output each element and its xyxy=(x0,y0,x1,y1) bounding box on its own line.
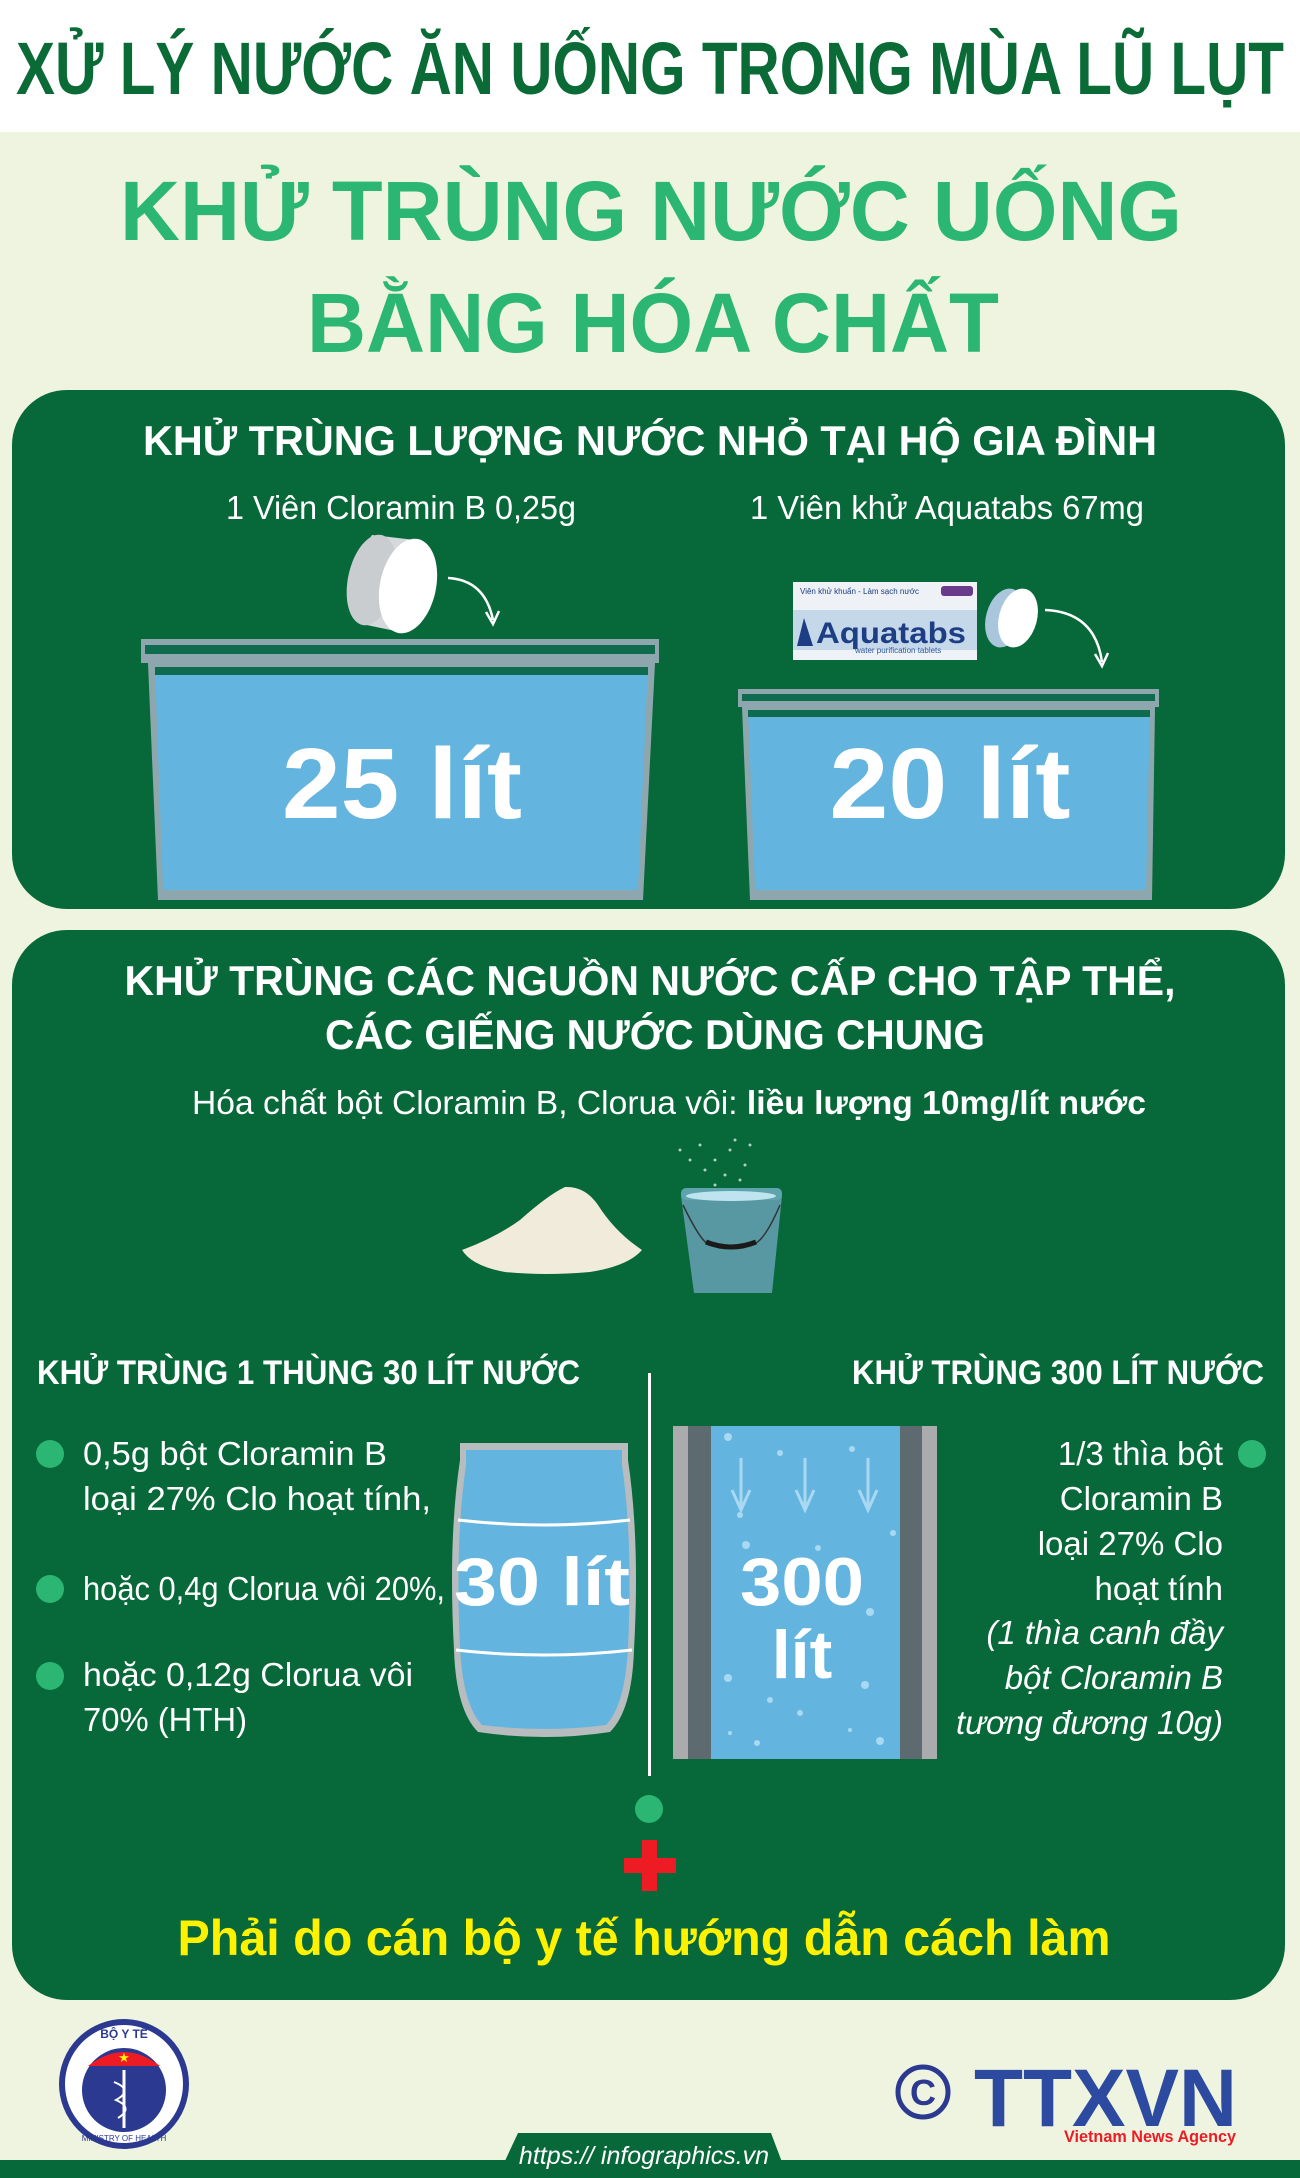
text right: tương đương 10g) xyxy=(956,1704,1223,1741)
subtitle xyxy=(120,164,1182,370)
text right: bột Cloramin B xyxy=(1005,1659,1223,1696)
aquatabs box: Aquatabs xyxy=(816,617,966,650)
bullet list left: 0,5g bột Cloramin B xyxy=(83,1435,387,1472)
barrel 30 lit xyxy=(452,1443,636,1737)
subheading left: KHỬ TRÙNG 1 THÙNG 30 LÍT NƯỚC xyxy=(37,1354,580,1392)
subtitle: KHỬ TRÙNG NƯỚC UỐNG xyxy=(120,164,1182,258)
panel: community xyxy=(12,930,1285,2000)
text right: loại 27% Clo xyxy=(1038,1525,1223,1562)
label: cloramin: 1 Viên Cloramin B 0,25g xyxy=(226,489,576,526)
icon: powder pile xyxy=(462,1187,642,1274)
logo: ministry of health: MINISTRY OF HEALTH xyxy=(82,2134,166,2143)
dosage text: Hóa chất bột Cloramin B, Clorua vôi: liều lượng 10mg/lít nước xyxy=(192,1084,1146,1121)
barrel 30 lit: 30 lít xyxy=(454,1544,630,1620)
footer band with url xyxy=(0,2133,1300,2178)
aquatabs box: water purification tablets xyxy=(854,646,941,655)
logo: ministry of health: BỘ Y TẾ xyxy=(100,2026,148,2041)
panel heading: KHỬ TRÙNG CÁC NGUỒN NƯỚC CẤP CHO TẬP THỂ, xyxy=(124,956,1176,1004)
subheading right: KHỬ TRÙNG 300 LÍT NƯỚC xyxy=(852,1354,1264,1392)
logo: ministry of health xyxy=(62,2022,186,2146)
logo: TTXVN: Vietnam News Agency xyxy=(1064,2127,1237,2146)
bucket 25 lit xyxy=(141,639,659,900)
logo: ministry of health: ★ xyxy=(118,2050,130,2065)
bullet list left: 70% (HTH) xyxy=(83,1701,247,1738)
green dot xyxy=(635,1795,663,1823)
tank 300 lit: lít xyxy=(772,1617,832,1693)
icon: red cross xyxy=(624,1840,676,1891)
text right xyxy=(956,1435,1266,1741)
arrow: tablet to bucket xyxy=(448,578,499,624)
subtitle: BẰNG HÓA CHẤT xyxy=(307,276,999,370)
text right: hoạt tính xyxy=(1095,1570,1223,1607)
bullet list left: hoặc 0,12g Clorua vôi xyxy=(83,1656,413,1693)
bullet list left: hoặc 0,4g Clorua vôi 20%, xyxy=(83,1570,445,1607)
bucket 25 lit: 25 lít xyxy=(282,728,522,840)
bucket 20 lit xyxy=(738,689,1159,900)
bucket 20 lit: 20 lít xyxy=(830,728,1070,840)
bullet list left xyxy=(36,1435,445,1738)
bullet list left: loại 27% Clo hoạt tính, xyxy=(83,1480,431,1517)
footer band with url: https:// infographics.vn xyxy=(519,2142,769,2170)
aquatabs box: Viên khử khuẩn - Làm sạch nước xyxy=(800,587,919,596)
icon: small tablet xyxy=(979,584,1044,652)
text right: 1/3 thìa bột xyxy=(1058,1435,1223,1472)
icon: water bucket xyxy=(678,1138,782,1293)
arrow: aquatabs to bucket xyxy=(1045,610,1108,666)
tank 300 lit: 300 xyxy=(740,1544,864,1620)
text right: Cloramin B xyxy=(1060,1480,1223,1517)
label: aquatabs: 1 Viên khử Aquatabs 67mg xyxy=(750,489,1144,526)
text right: (1 thìa canh đầy xyxy=(986,1614,1225,1651)
tank 300 lit xyxy=(673,1426,937,1759)
panel: household xyxy=(12,390,1285,909)
header band xyxy=(0,0,1300,132)
panel heading: KHỬ TRÙNG LƯỢNG NƯỚC NHỎ TẠI HỘ GIA ĐÌNH xyxy=(143,416,1157,464)
aquatabs box xyxy=(793,582,977,660)
panel: community: CÁC GIẾNG NƯỚC DÙNG CHUNG xyxy=(325,1010,985,1058)
logo: copyright xyxy=(898,2067,948,2117)
callout: yellow note: Phải do cán bộ y tế hướng dẫn cách làm xyxy=(178,1910,1110,1966)
logo: TTXVN: TTXVN xyxy=(974,2053,1237,2144)
icon: tablet xyxy=(339,530,445,639)
logo: copyright: C xyxy=(910,2072,936,2113)
